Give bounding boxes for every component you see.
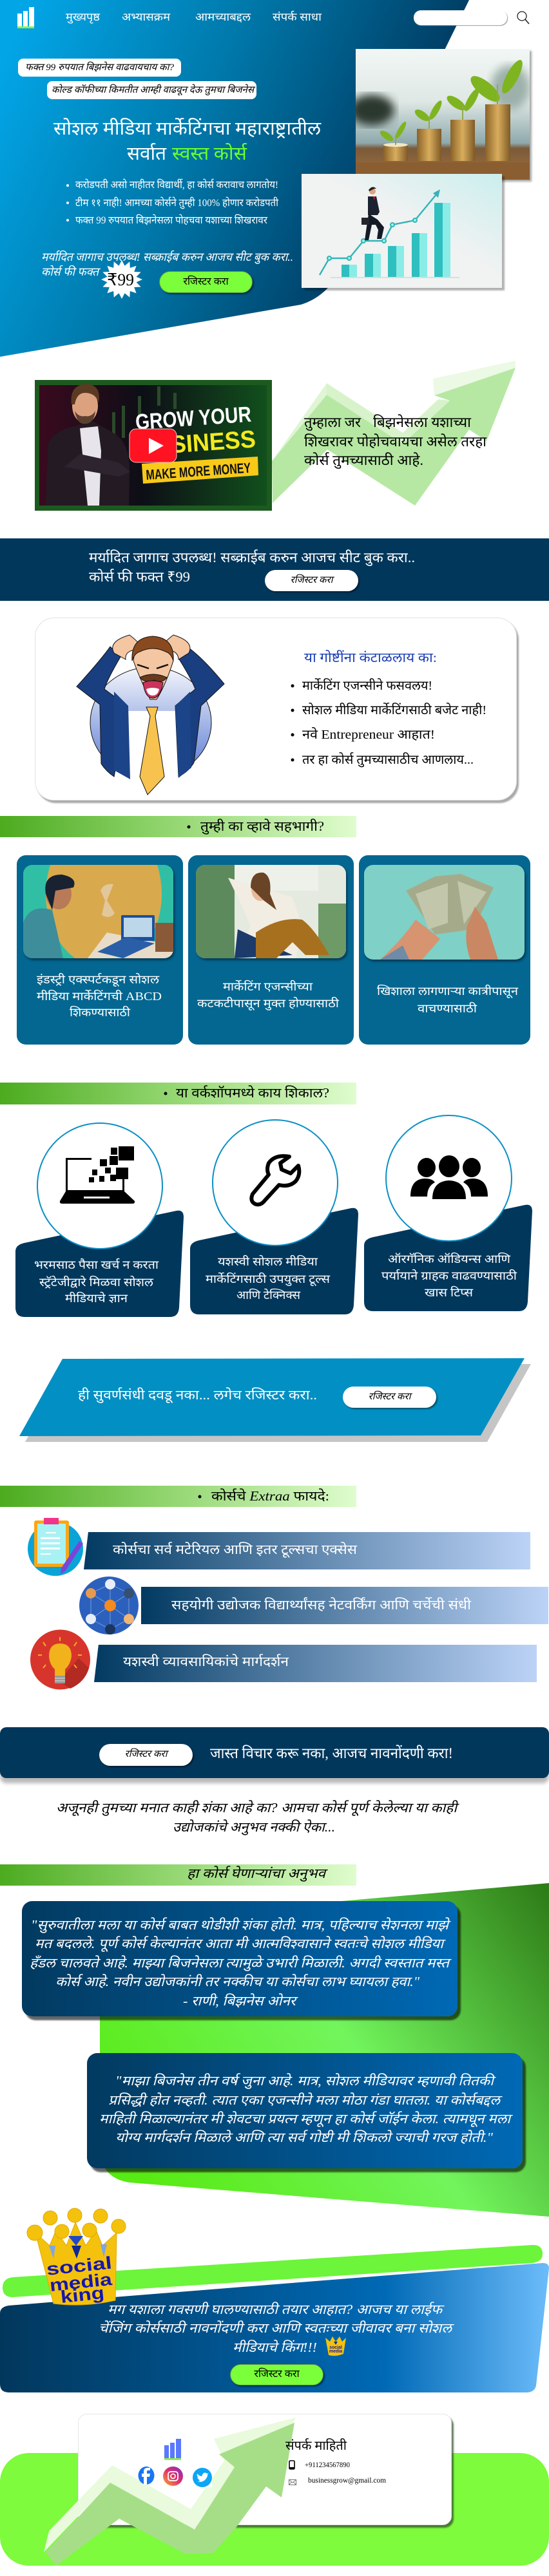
navigation: अभ्यासक्रम [122,11,171,23]
tagline pill two [47,81,256,99]
panel: what you will learn [0,1083,532,1317]
price starburst: ₹99 [107,270,134,289]
intro text: बिझनेसला यशाच्या [373,414,471,430]
tagline pill two: कोल्ड कॉफीच्या किमतीत आम्ही वाढवून देऊ तुमचा बिजनेस [52,84,256,96]
icon: large growth arrow [44,2414,302,2566]
icon: clipboard [28,1518,83,1576]
icon: crown logo: king [59,2283,105,2307]
image: coins and plants [356,49,530,180]
icon: small crown [324,2334,347,2356]
benefit text: कोर्सचा सर्व मटेरियल आणि इतर टूल्सचा एक्सेस [113,1542,358,1558]
offer text: मर्यादित जागाच उपलब्ध! सब्क्राईब करुन आजच सीट बुक करा.. [41,250,293,264]
pain points heading: या गोष्टींना कंटाळलाय का: [304,650,437,665]
panel: hero [0,0,533,357]
doubt text [52,1797,464,1837]
navigation [66,10,322,24]
icon: crown logo: social [45,2253,113,2279]
image: businessman climbing chart [302,174,502,288]
testimonial two text: माहिती मिळाल्यानंतर मी शेवटचा प्रयत्न म्हणून हा कोर्स जॉईन केला. त्यामधून मला [99,2111,513,2127]
card text [37,972,162,1019]
icon circle: wrench [212,1119,338,1246]
card: audience tips [364,1115,532,1311]
card: agency freedom [188,855,354,1045]
video thumbnail: BUSINESS [137,426,256,461]
section heading bar: testimonials [0,1864,356,1886]
hero background shape [0,0,469,357]
register button: रजिस्टर करा [125,1749,167,1759]
icon: search [517,11,530,24]
register button: रजिस्टर करा [183,276,229,287]
panel: testimonials [0,1883,549,2217]
offer band text: मर्यादित जागाच उपलब्ध! सब्क्राईब करुन आजच सीट बुक करा.. [89,549,415,566]
section heading bar: कोर्सचे Extraa फायदे: [211,1488,329,1504]
search box [414,10,507,25]
testimonial one text: - राणी, बिझनेस ओनर [183,1993,299,2009]
pain points list: तर हा कोर्स तुमच्यासाठीच आणलाय... [302,752,474,768]
photo: rupee notes [364,865,525,960]
intro text: तुम्हाला जर [304,414,361,431]
card text [377,984,519,1015]
register button [159,271,253,293]
icon: network [79,1577,139,1634]
icon: phone [289,2460,295,2470]
call to action text: चेंजिंग कोर्ससाठी नावनोंदणी करा आणि स्वतःच्या जीवावर बना सोशल [99,2320,455,2336]
photo: relaxed woman [196,865,346,958]
banner shape [19,1358,531,1442]
testimonial two text: प्रसिद्धी होत नव्हती. त्यात एका एजन्सीने मला मोठा गंडा घातला. या कोर्सबद्दल [108,2092,503,2108]
benefit row: networking [79,1577,548,1634]
illustration: frustrated businessman [76,635,225,795]
contact card [78,2414,452,2525]
card text: वाचण्यासाठी [418,1001,477,1015]
icon: instagram [163,2467,183,2486]
tagline pill one: फक्त 99 रुपयात बिझनेस वाढवायचाय का? [25,61,174,73]
testimonial two text [97,2072,512,2149]
card text [34,1258,159,1305]
card shape [15,1211,184,1317]
testimonial two [87,2053,523,2168]
hero heading: सोशल मीडिया मार्केटिंगचा महाराष्ट्रातील [53,118,322,139]
offer band text: कोर्स फी फक्त ₹99 [89,569,190,585]
testimonial one text: "सुरुवातीला मला या कोर्स बाबत थोडीशी शंका होती. मात्र, पहिल्याच सेशनला माझे [31,1917,451,1933]
price starburst [101,260,142,299]
banner text: ही सुवर्णसंधी दवडू नका... लगेच रजिस्टर करा.. [78,1387,317,1403]
register button [343,1387,436,1408]
card shape [190,1208,358,1314]
card text: खास टिप्स [425,1285,474,1299]
panel shape [0,2263,549,2393]
hero bullet list [66,178,279,226]
contact heading: संपर्क माहिती [285,2438,347,2453]
card: save money [359,855,530,1045]
green background [0,1883,549,2217]
hero heading: स्वस्त कोर्स [172,143,247,164]
card text: स्ट्रॅटेजीद्वारे मिळवा सोशल [39,1275,153,1289]
benefit text: यशस्वी व्यावसायिकांचे मार्गदर्शन [123,1654,289,1669]
video thumbnail [35,380,272,511]
panel: pain points [35,618,517,800]
testimonial one text: हँडल चालवते आहे. माझ्या बिजनेसला त्यामुळे उभारी मिळाली. अगदी स्वस्तात मस्त [30,1955,452,1971]
green stripe [0,2242,549,2300]
benefit row: material [28,1518,530,1576]
card: knowledge [15,1122,184,1317]
band text: जास्त विचार करू नका, आजच नावनोंदणी करा! [210,1745,453,1761]
testimonial one text [26,1916,454,2012]
card shape [364,1204,532,1311]
hero heading: सर्वात [127,143,166,164]
card text: मार्केटिंग एजन्सीच्या [223,980,313,993]
testimonial one text: मत बदलले. पूर्ण कोर्स केल्यानंतर आता मी आत्मविश्वासाने स्वतःचे सोशल मीडिया [35,1936,446,1952]
icon circle: people [385,1115,512,1242]
panel: extra benefits [0,1486,548,1690]
card text: भरमसाठ पैसा खर्च न करता [34,1258,159,1271]
call to action text: मग यशाला गवसणी घालण्यासाठी तयार आहात? आजच या लाईफ [108,2302,445,2317]
icon: small crown: social [329,2345,342,2350]
icon: twitter [193,2468,212,2487]
section heading bar [0,816,356,837]
icon: growth arrow [272,361,515,506]
email address: businessgrow@gmail.com [308,2476,387,2485]
card: expert learning [17,855,183,1045]
doubt text: अजूनही तुमच्या मनात काही शंका आहे का? आमचा कोर्स पूर्ण केलेल्या या काही [56,1800,459,1816]
section heading bar: या वर्कशॉपमध्ये काय शिकाल? [176,1085,329,1101]
panel: register band [0,1727,549,1778]
register button [230,2364,323,2385]
panel: golden chance cta [19,1358,531,1442]
social links [138,2439,213,2488]
phone number: +911234567890 [305,2460,350,2469]
logo [17,7,34,28]
benefit row: mentoring [30,1629,537,1690]
panel: final call to action [0,2207,549,2394]
icon circle: laptop [37,1122,163,1249]
offer text [41,250,293,278]
pain points list: नवे Entrepreneur आहात! [302,727,435,742]
doubt text: उद्योजकांचे अनुभव नक्की ऐका... [173,1819,335,1835]
icon: small crown: media [329,2349,342,2354]
icon: footer logo [164,2439,181,2460]
card text: शिकण्यासाठी [70,1005,130,1019]
panel: footer [0,2414,549,2566]
icon: laptop [59,1146,135,1204]
call to action text: मीडियाचे किंग!!! [233,2340,317,2355]
card text: इंडस्ट्री एक्स्पर्टकडून सोशल [37,972,159,987]
pain points list: सोशल मीडिया मार्केटिंगसाठी बजेट नाही! [302,703,486,717]
hero bullet list: टीम ११ नाही! आमच्या कोर्सने तुम्ही 100% होणार करोडपती [75,196,279,209]
card text: यशस्वी सोशल मीडिया [218,1255,318,1268]
card text: पर्यायाने ग्राहक वाढवण्यासाठी [381,1269,517,1282]
testimonial two text: "माझा बिजनेस तीन वर्ष जुना आहे. मात्र, सोशल मीडियावर म्हणावी तितकी [115,2073,496,2089]
card text: ऑरगॅनिक ऑडियन्स आणि [388,1252,511,1265]
card text [206,1255,331,1302]
testimonial one text: कोर्स आहे. नवीन उद्योजकांनी तर नक्कीच या कोर्सचा लाभ घ्यायला हवा." [55,1974,419,1989]
icon: mail [289,2479,296,2485]
card text: मार्केटिंगसाठी उपयुक्त टूल्स [206,1272,331,1286]
intro text: शिखरावर पोहोचवायचा असेल तरहा [304,433,486,450]
card text [381,1252,517,1299]
section heading bar: testimonials: हा कोर्स घेणाऱ्यांचा अनुभव [187,1866,329,1882]
icon: people [410,1155,488,1199]
footer green band [0,2453,549,2566]
icon: light bulb [30,1629,91,1690]
photo: student online [23,865,173,958]
tagline pill one [18,59,181,77]
register button: रजिस्टर करा [290,575,332,585]
card text: मीडियाचे ज्ञान [65,1291,128,1305]
call to action text [97,2300,454,2358]
panel: video intro [35,361,515,511]
navigation: संपर्क साधा [273,10,322,23]
card text: खिशाला लागणाऱ्या कात्रीपासून [377,984,519,998]
icon: facebook [138,2467,155,2485]
intro text [304,414,487,469]
benefit text: सहयोगी उद्योजक विद्यार्थ्यांसह नेटवर्किंग आणि चर्चेची संधी [171,1597,472,1613]
intro text: कोर्स तुमच्यासाठी आहे. [304,452,423,469]
section heading bar: तुम्ही का व्हावे सहभागी? [200,819,324,835]
testimonial two text: योग्य मार्गदर्शन मिळाले आणि त्या सर्व गोष्टी मी शिकलो ज्याची गरज होती." [115,2130,493,2145]
section heading bar [0,1486,356,1507]
register button [99,1744,193,1766]
navigation: मुख्यपृष्ठ [66,11,101,24]
card text: मीडिया मार्केटिंगची ABCD [37,989,162,1003]
benefit bar [84,1532,530,1569]
icon: crown logo [26,2207,126,2306]
register button [265,570,358,591]
pain points list [291,678,486,768]
offer text: कोर्स फी फक्त [41,265,101,278]
testimonial one [22,1901,458,2016]
icon: crown logo: media [48,2269,113,2295]
video thumbnail: GROW YOUR [135,402,252,435]
offer band text [89,549,415,585]
hero heading [53,118,322,164]
card text: कटकटीपासून मुक्त होण्यासाठी [197,996,339,1010]
hero bullet list: फक्त 99 रुपयात बिझनेसला पोहचवा यशाच्या शिखरावर [75,214,267,226]
panel: offer band [0,538,549,601]
card text: आणि टेक्निक्स [236,1288,301,1302]
pain points list: मार्केटिंग एजन्सीने फसवलय! [302,678,432,693]
icon: wrench [249,1154,302,1207]
card: tools [190,1119,358,1314]
benefit bar [141,1587,548,1624]
register button: रजिस्टर करा [369,1392,410,1402]
hero bullet list: करोडपती असो नाहीतर विद्यार्थी, हा कोर्स करावाच लागतोय! [75,178,278,191]
card text [197,980,339,1010]
navigation: आमच्याबद्दल [195,11,251,23]
contact details [285,2436,389,2488]
section heading bar [0,1083,356,1104]
register button: रजिस्टर करा [254,2369,300,2380]
benefit bar [94,1645,537,1682]
panel: why join [0,816,530,1045]
video thumbnail: MAKE MORE MONEY [146,460,251,483]
